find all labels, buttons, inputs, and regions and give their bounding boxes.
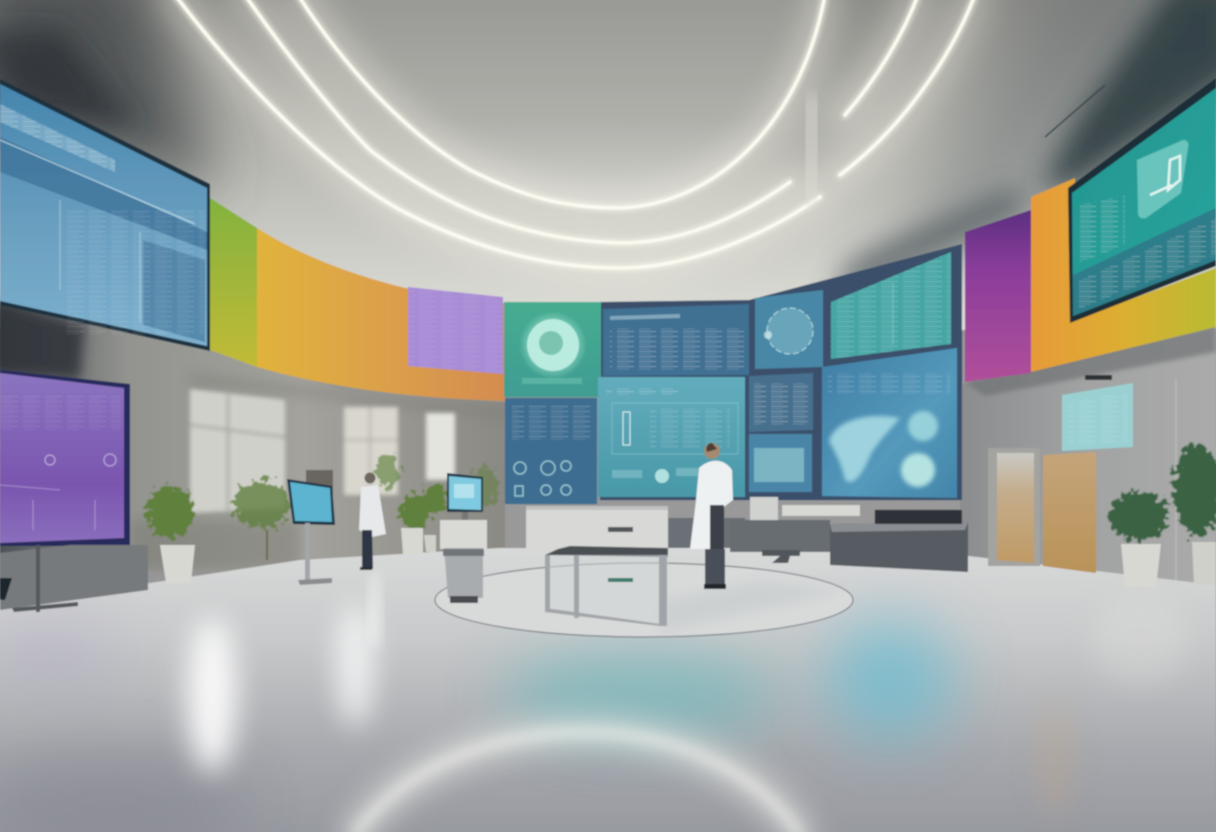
white reception counter xyxy=(526,506,668,552)
panel: orange yellow wall right xyxy=(1031,178,1216,372)
ceiling inner dome xyxy=(298,0,826,208)
person left in lab coat xyxy=(359,472,386,570)
screen: teal text panel xyxy=(831,252,951,359)
ceiling xyxy=(0,0,1216,330)
kiosk monitor right xyxy=(447,473,483,520)
kiosk monitor left xyxy=(287,470,335,585)
left lower wall xyxy=(0,300,505,570)
reception desks xyxy=(668,497,968,572)
screen: top left blue xyxy=(0,79,210,351)
windows xyxy=(190,389,455,513)
screen: purple top xyxy=(408,287,503,374)
screen: world map xyxy=(822,348,957,498)
floor xyxy=(0,548,1216,832)
screen: green circle xyxy=(504,302,601,397)
screen: lower left blue icons xyxy=(505,398,597,504)
ceiling light rings xyxy=(175,0,975,268)
plants and planters left xyxy=(146,452,497,583)
screen: left purple xyxy=(0,370,130,546)
person centre in lab coat xyxy=(690,443,733,589)
right lower wall xyxy=(960,320,1216,590)
plants and planters right xyxy=(1109,444,1216,587)
doors xyxy=(988,448,1096,573)
screen: top right teal xyxy=(1068,78,1216,323)
panel: green wall xyxy=(210,198,257,367)
screen wall backing xyxy=(600,244,962,500)
table xyxy=(545,546,668,626)
floor circular platform xyxy=(435,563,853,637)
screen: blue text panel xyxy=(603,304,749,376)
panel: purple wall right xyxy=(965,210,1031,382)
screen: blue circle xyxy=(755,290,823,369)
screen: right small panels xyxy=(749,373,813,492)
wall screen right xyxy=(1062,383,1133,451)
floor ring reflection xyxy=(355,732,800,832)
medical cart xyxy=(440,520,487,603)
screen stand left xyxy=(0,545,148,612)
screen: central teal chart xyxy=(598,377,745,497)
panel: orange wall xyxy=(257,228,505,401)
